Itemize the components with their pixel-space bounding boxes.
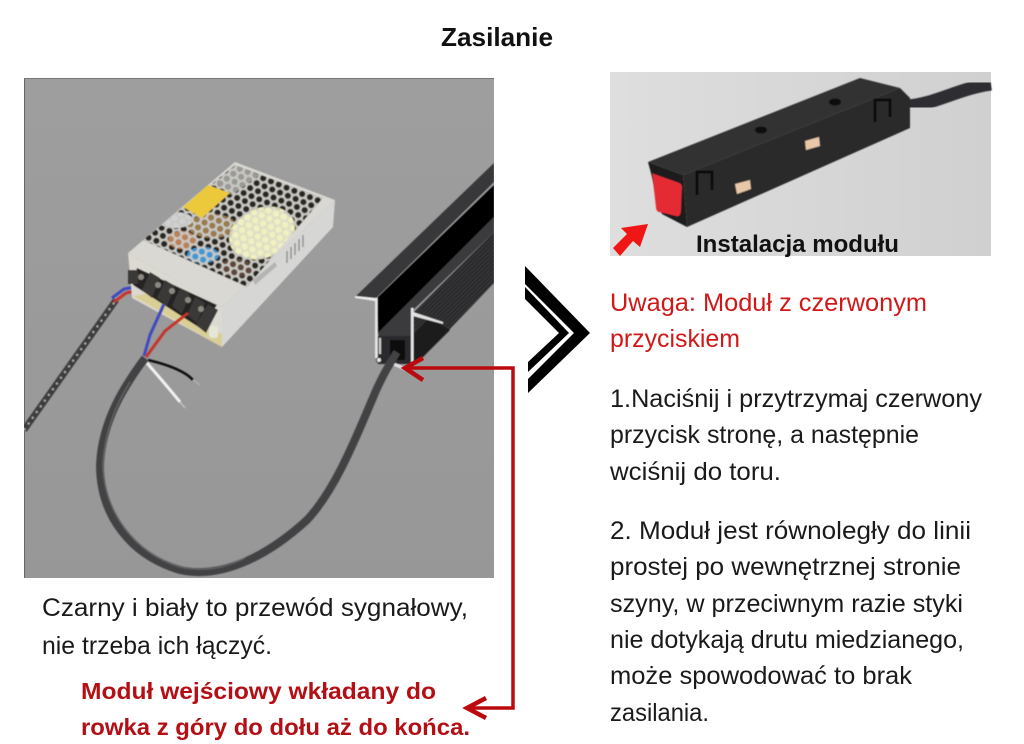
title: Zasilanie (441, 22, 553, 52)
icon: track module (648, 78, 910, 227)
text block: step 1: przycisk stronę, a następnie (610, 421, 919, 449)
callout: input module instruction (81, 678, 470, 740)
icon: magnetic rail (355, 163, 494, 371)
text block: step 1 (609, 385, 983, 486)
text block: step 2: 2. Moduł jest równoległy do linii (610, 517, 971, 545)
text block: step 2: zasilania. (610, 699, 709, 727)
icon: power supply (128, 162, 336, 348)
icon: double chevron (525, 266, 590, 393)
icon: signal cable to power supply (24, 286, 146, 430)
panel: module photo (610, 72, 991, 258)
text block: step 1: 1.Naciśnij i przytrzymaj czerwony (610, 385, 983, 413)
icon: input cable (100, 352, 397, 572)
icon: power wires blue and red (144, 304, 188, 357)
warning text: Uwaga: Moduł z czerwonym (610, 289, 927, 317)
text block: step 2: szyny, w przeciwnym razie styki (610, 590, 963, 618)
icon: black and white signal wires (147, 360, 200, 408)
text block: signal wire note: nie trzeba ich łączyć. (42, 632, 272, 660)
callout: input module instruction: rowka z góry do dołu aż do końca. (81, 714, 470, 740)
warning text: przyciskiem (610, 325, 740, 353)
text block: step 2 (610, 517, 971, 727)
text block: step 2: może spowodować to brak (610, 662, 913, 690)
icon: red button (652, 173, 682, 216)
text block: signal wire note: Czarny i biały to przewód sygnałowy, (42, 594, 468, 622)
warning text (610, 289, 927, 353)
panel: wiring photo (24, 78, 494, 578)
text block: signal wire note (42, 594, 468, 660)
icon: red pointer arrow (613, 224, 648, 256)
text block: step 2: nie dotykają drutu miedzianego, (610, 626, 964, 654)
icon: module cable (908, 84, 991, 106)
arrow: red connector from rail to caption (405, 358, 513, 718)
callout: input module instruction: Moduł wejściowy wkładany do (81, 678, 436, 704)
module label: Instalacja modułu (696, 231, 899, 258)
text block: step 2: prostej po wewnętrznej stronie (610, 553, 961, 581)
text block: step 1: wciśnij do toru. (609, 458, 781, 486)
